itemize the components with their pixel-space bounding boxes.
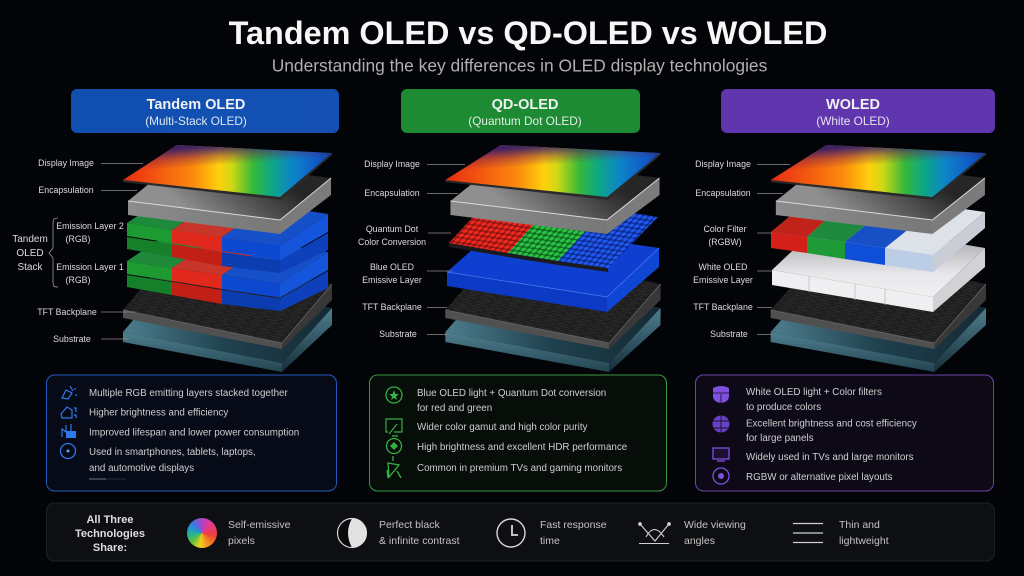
- layer: display image: [768, 143, 989, 201]
- feature text: High brightness and excellent HDR performance: [417, 442, 628, 453]
- layer: TFT backplane: [123, 251, 332, 349]
- feature: fast response: [540, 519, 607, 547]
- heading: all three technologies share: All Three: [86, 514, 134, 526]
- layer labels: Tandem OLED: Stack: [17, 262, 44, 273]
- layer labels: WOLED: TFT Backplane: [693, 302, 753, 312]
- feature: perfect black: Perfect black: [379, 519, 440, 531]
- layer labels: WOLED: [693, 159, 790, 339]
- panel: WOLED features: [696, 375, 994, 491]
- layer labels: WOLED: Encapsulation: [695, 188, 751, 198]
- heading: Tandem OLED: (Multi-Stack OLED): [145, 114, 247, 128]
- layer labels: WOLED: White OLED: [699, 262, 747, 272]
- stack diagram: Tandem OLED: [120, 143, 335, 372]
- layer: substrate: [123, 273, 332, 372]
- feature: perfect black: [379, 519, 460, 547]
- layer labels: QD-OLED: Substrate: [379, 329, 417, 339]
- feature text: Multiple RGB emitting layers stacked together: [89, 388, 288, 399]
- heading: all three technologies share: [75, 514, 145, 554]
- layer: quantum dot colour conversion: [449, 193, 658, 272]
- feature: thin and lightweight: lightweight: [839, 535, 889, 547]
- layer: substrate: [771, 273, 986, 372]
- icon: shield: [713, 386, 729, 403]
- layer: TFT backplane: [771, 251, 986, 349]
- layer labels: Tandem OLED: Emission Layer 2: [56, 221, 124, 231]
- layer labels: QD-OLED: Quantum Dot: [366, 224, 419, 234]
- heading: QD-OLED: (Quantum Dot OLED): [468, 114, 582, 128]
- layer labels: Tandem OLED: (RGB): [66, 275, 91, 285]
- stack diagram: WOLED: [768, 143, 989, 372]
- icon: clock: [497, 519, 525, 547]
- feature: wide viewing angles: [684, 519, 746, 547]
- feature text: Wider color gamut and high color purity: [417, 422, 588, 433]
- icon: monitor: [713, 448, 729, 461]
- heading: all three technologies share: Technologies: [75, 528, 145, 540]
- icon: globe panel: [712, 415, 730, 433]
- title: Tandem OLED vs QD-OLED vs WOLED: [229, 15, 827, 51]
- icon: colour wheel: [186, 517, 218, 549]
- panel: shared features bar: [46, 503, 994, 561]
- feature: self-emissive pixels: pixels: [228, 535, 255, 547]
- layer: emission layer 1: [127, 229, 328, 311]
- stack diagram: QD-OLED: [442, 143, 664, 372]
- feature: perfect black: & infinite contrast: [379, 535, 460, 547]
- icon: lifespan battery: [62, 424, 76, 438]
- layer: emission layer 2: [127, 191, 328, 273]
- heading: WOLED: (White OLED): [816, 114, 890, 128]
- layer: encapsulation: [128, 159, 331, 234]
- icon: monitor: [386, 419, 402, 436]
- subtitle: Understanding the key differences in OLED display technologies: [272, 56, 768, 76]
- heading: Tandem OLED: [71, 89, 339, 133]
- layer labels: Tandem OLED: OLED: [16, 248, 44, 259]
- layer labels: Tandem OLED: Substrate: [53, 334, 91, 344]
- layer labels: QD-OLED: TFT Backplane: [362, 302, 422, 312]
- layer labels: WOLED: (RGBW): [708, 237, 742, 247]
- layer labels: Tandem OLED: [12, 158, 143, 344]
- heading: QD-OLED: [401, 89, 640, 133]
- icon: HDR circle: [386, 438, 402, 454]
- feature: thin and lightweight: [839, 519, 889, 547]
- icon: viewing angles: [639, 523, 670, 544]
- feature: fast response: time: [540, 535, 560, 547]
- layer labels: Tandem OLED: (RGB): [66, 234, 91, 244]
- feature: thin and lightweight: Thin and: [839, 519, 880, 531]
- feature text continued: and automotive displays: [89, 463, 194, 474]
- feature: fast response: Fast response: [540, 519, 607, 531]
- layer labels: WOLED: Color Filter: [703, 224, 747, 234]
- layer labels: QD-OLED: Display Image: [364, 159, 420, 169]
- layer labels: QD-OLED: Encapsulation: [364, 188, 420, 198]
- layer labels: Tandem OLED: Emission Layer 1: [56, 262, 124, 272]
- icon: stacked layers scatter: [62, 386, 77, 399]
- feature text: RGBW or alternative pixel layouts: [746, 472, 893, 483]
- icon: pixel target: [713, 468, 729, 484]
- feature text: Blue OLED light + Quantum Dot conversion: [417, 388, 606, 399]
- layer labels: Tandem OLED: TFT Backplane: [37, 307, 97, 317]
- layer labels: WOLED: Display Image: [695, 159, 751, 169]
- layer: display image: [442, 143, 664, 201]
- feature text: Excellent brightness and cost efficiency: [746, 418, 917, 430]
- layer: display image: [120, 143, 335, 201]
- layer labels: WOLED: Substrate: [710, 329, 748, 339]
- panel: QD-OLED features: [370, 375, 666, 491]
- layer: white OLED emissive: [772, 221, 985, 312]
- layer labels: QD-OLED: [358, 159, 465, 339]
- icon: device circle: [60, 444, 76, 458]
- icon: brightness: [61, 407, 76, 418]
- feature text: Widely used in TVs and large monitors: [746, 452, 914, 463]
- heading: Tandem OLED: Tandem OLED: [147, 97, 245, 113]
- layer: encapsulation: [776, 159, 985, 234]
- panel: Tandem OLED features: [46, 375, 336, 491]
- icon: half-moon contrast: [338, 518, 366, 548]
- heading: WOLED: WOLED: [826, 97, 880, 113]
- layer: colour filter RGBW: [771, 189, 985, 272]
- layer labels: QD-OLED: Blue OLED: [370, 262, 414, 272]
- feature text: Common in premium TVs and gaming monitors: [417, 463, 622, 474]
- heading: WOLED: [721, 89, 995, 133]
- feature text: White OLED light + Color filters: [746, 387, 882, 398]
- layer labels: Tandem OLED: Display Image: [38, 158, 94, 168]
- icon: star circle: [386, 387, 402, 403]
- layer labels: QD-OLED: Emissive Layer: [362, 275, 422, 285]
- feature text continued: for red and green: [417, 403, 492, 414]
- icon: gaming star: [387, 456, 401, 478]
- layer labels: Tandem OLED: Encapsulation: [38, 185, 94, 195]
- feature text: Used in smartphones, tablets, laptops,: [89, 447, 256, 458]
- feature: wide viewing angles: angles: [684, 535, 715, 547]
- feature text: Improved lifespan and lower power consumption: [89, 428, 299, 438]
- layer: TFT backplane: [445, 251, 661, 349]
- layer labels: Tandem OLED: Tandem: [12, 234, 48, 245]
- icon: thin lines: [793, 524, 823, 542]
- layer labels: WOLED: Emissive Layer: [693, 275, 753, 285]
- layer: encapsulation: [450, 159, 660, 234]
- layer labels: QD-OLED: Color Conversion: [358, 237, 426, 247]
- feature: self-emissive pixels: [228, 519, 291, 547]
- heading: QD-OLED: QD-OLED: [492, 97, 558, 113]
- heading: all three technologies share: Share:: [93, 542, 127, 554]
- feature: wide viewing angles: Wide viewing: [684, 519, 746, 531]
- layer: blue OLED emissive: [447, 225, 659, 312]
- layer: substrate: [445, 273, 661, 372]
- feature text continued: to produce colors: [746, 402, 821, 413]
- feature: self-emissive pixels: Self-emissive: [228, 519, 291, 531]
- feature text continued: for large panels: [746, 433, 814, 444]
- feature text: Higher brightness and efficiency: [89, 408, 228, 418]
